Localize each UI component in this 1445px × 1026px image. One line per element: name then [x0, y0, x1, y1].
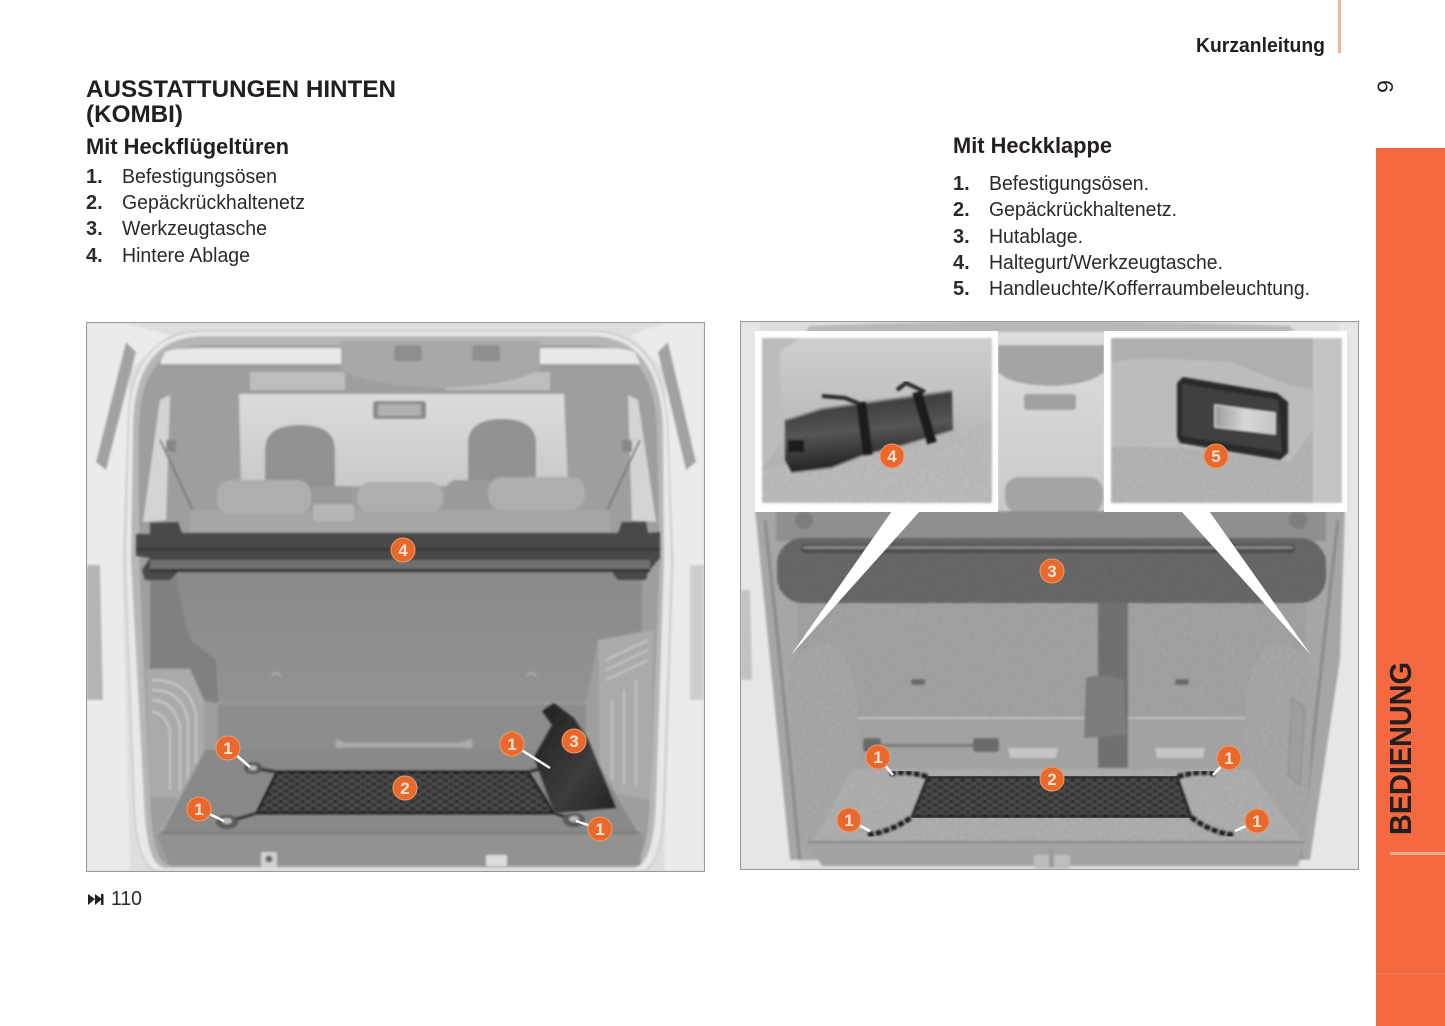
storage net [227, 766, 574, 822]
subheading: Mit Heckflügeltüren: Mit Heckflügeltüren [86, 134, 289, 159]
parcel shelf [136, 522, 660, 580]
floor [830, 772, 1278, 840]
callout 1: 1 [595, 820, 605, 839]
inset: hand lamp [1104, 331, 1347, 512]
windshield section [998, 394, 1104, 512]
list: Heckflügeltüren items: Werkzeugtasche [122, 218, 267, 240]
list: Heckklappe items: Hutablage. [989, 226, 1083, 248]
list: Heckklappe items: 4. [953, 252, 970, 274]
callout 2 [1040, 767, 1064, 791]
callout 1 [187, 797, 211, 821]
callout 2 [393, 776, 417, 800]
callout 1: 1 [844, 811, 854, 830]
page reference [88, 888, 142, 910]
callout 4 [880, 444, 904, 468]
callout 1 [500, 732, 524, 756]
callout 1: 1 [1224, 749, 1234, 768]
list: Heckflügeltüren items: Hintere Ablage [122, 245, 250, 267]
callout 1: 1 [223, 739, 233, 758]
list: Heckklappe items [953, 173, 1310, 300]
list: Heckflügeltüren items: 2. [86, 192, 103, 214]
callout 1: 1 [194, 800, 204, 819]
list: Heckklappe items: 3. [953, 226, 970, 248]
lashing chains [868, 773, 1233, 835]
lashing eyes [216, 762, 585, 829]
callout 1: 1 [507, 735, 517, 754]
callout 4: 4 [887, 447, 897, 466]
callout leaders [199, 744, 600, 829]
list: Heckflügeltüren items: 1. [86, 166, 103, 188]
illustration: load area with tailgate [740, 321, 1358, 870]
storage net [912, 777, 1191, 817]
list: Heckflügeltüren items [86, 166, 305, 267]
tool bag [785, 383, 955, 473]
floor [160, 750, 640, 834]
page number: 9 [1373, 80, 1398, 93]
callout 3: 3 [1047, 562, 1057, 581]
page reference: 110 [111, 888, 142, 910]
list: Heckklappe items: Handleuchte/Kofferraumbeleuchtung. [989, 278, 1310, 300]
list: Heckklappe items: Haltegurt/Werkzeugtasche. [989, 252, 1223, 274]
callout 4: 4 [398, 541, 408, 560]
side trims [787, 645, 860, 850]
callout 3 [1040, 559, 1064, 583]
header accent rule [1338, 0, 1341, 53]
callout 2: 2 [400, 779, 410, 798]
list: Heckklappe items: 1. [953, 173, 970, 195]
page header: Kurzanleitung: Kurzanleitung [1196, 35, 1325, 57]
callout 4 [391, 538, 415, 562]
callout 2: 2 [1047, 770, 1057, 789]
callout 1 [1245, 809, 1269, 833]
callout 1 [837, 808, 861, 832]
title [86, 76, 396, 128]
tool bag [534, 703, 616, 813]
lamp unit [1177, 377, 1288, 460]
rear wall [156, 572, 642, 703]
list: Heckklappe items: 5. [953, 278, 970, 300]
list: Heckflügeltüren items: 3. [86, 218, 103, 240]
title: AUSSTATTUNGEN HINTEN [86, 76, 396, 103]
callout 3 [562, 729, 586, 753]
callout 1: 1 [1252, 812, 1262, 831]
side tab: Bedienung: BEDIENUNG [1383, 662, 1418, 835]
inset: tool bag strap [755, 331, 998, 512]
list: Heckklappe items: Gepäckrückhaltenetz. [989, 199, 1177, 221]
callout 1 [588, 817, 612, 841]
interior cabin [139, 345, 660, 866]
subheading: Mit Heckklappe: Mit Heckklappe [953, 133, 1112, 158]
back wall [797, 600, 1305, 722]
callout 5 [1204, 444, 1228, 468]
callout leaders [849, 757, 1257, 831]
list: Heckflügeltüren items: Gepäckrückhaltenetz [122, 192, 305, 214]
list: Heckklappe items: Befestigungsösen. [989, 173, 1149, 195]
callout 1 [1217, 746, 1241, 770]
callout 3: 3 [569, 732, 579, 751]
list: Heckflügeltüren items: Befestigungsösen [122, 166, 277, 188]
callout 5: 5 [1211, 447, 1221, 466]
list: Heckflügeltüren items: 4. [86, 245, 103, 267]
side tab: Bedienung [1376, 148, 1445, 1026]
list: Heckklappe items: 2. [953, 199, 970, 221]
callout 1 [216, 736, 240, 760]
callout 1: 1 [873, 748, 883, 767]
hat shelf [777, 538, 1326, 603]
title: (KOMBI) [86, 101, 183, 128]
illustration: load area with rear wing doors [86, 322, 704, 872]
inset pointers [791, 511, 1311, 655]
callout 1 [866, 745, 890, 769]
